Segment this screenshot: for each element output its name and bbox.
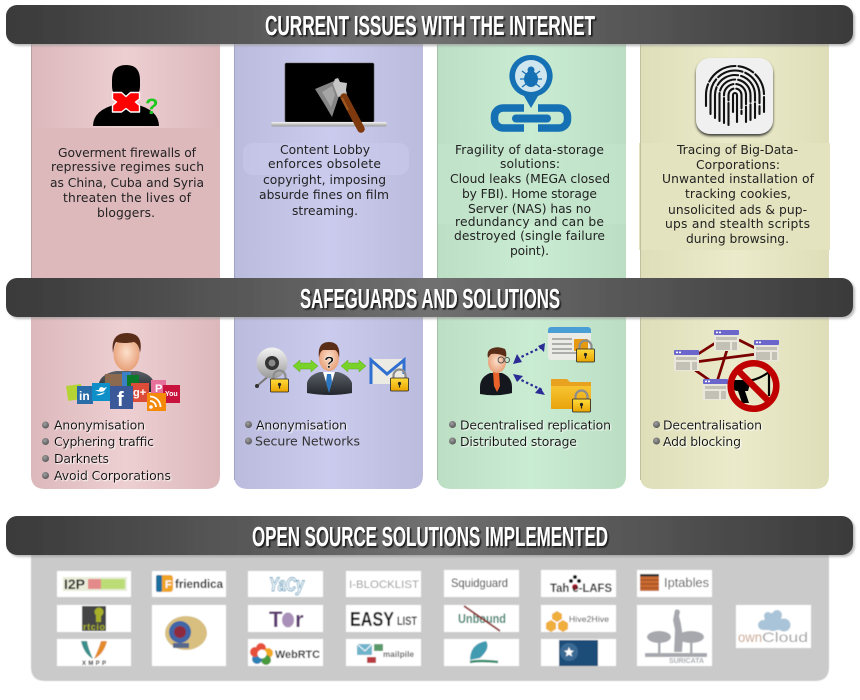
logo: Tor: r: [295, 607, 304, 632]
body text: column 4: [662, 143, 815, 246]
icon: person replicating to window and folder: [480, 327, 594, 412]
list: column 3 solutions: Decentralised replication: [460, 418, 611, 432]
body text: column 2: copyright, imposing: [263, 173, 386, 187]
logo: rtc.io: rtcio: [83, 622, 106, 632]
body text: column 3: Fragility of data-storage: [455, 143, 604, 157]
list: column 1 solutions: Darknets: [54, 451, 109, 466]
panel: column 1 red: [31, 40, 220, 489]
logo: ownCloud: [738, 610, 808, 645]
icon: decentralised network with ad blocking: [674, 330, 779, 409]
heading: open source solutions: OPEN SOURCE SOLUTIONS IMPLEMENTED: [252, 521, 608, 552]
panel: column 4 yellow: [639, 40, 830, 489]
logo: Squidguard: Squidguard: [451, 576, 508, 590]
logo: Hive2Hive: [546, 611, 609, 632]
body text: column 4: unsolicited ads & pup-: [668, 203, 807, 217]
logo: Hive2Hive: Hive2Hive: [569, 614, 609, 624]
logo: friendica: [156, 575, 224, 592]
heading: current issues: CURRENT ISSUES WITH THE INTERNET: [265, 10, 595, 41]
logo: Suricata: [645, 609, 707, 665]
logo: mailpile: mailpile: [383, 650, 415, 659]
body text: column 3: solutions:: [500, 157, 560, 171]
logo: Tahoe-LAFS: [550, 575, 612, 595]
body text: column 1: bloggers.: [97, 206, 155, 220]
body text: column 4: ups and stealth scripts: [665, 217, 810, 231]
logo: I2P: [63, 576, 127, 592]
heading: open source solutions: [6, 516, 853, 555]
logo: YaCy: YaCy: [269, 575, 305, 596]
body text: column 2: absurde fines on film: [259, 188, 389, 202]
logo: XMPP: XMPP: [82, 661, 106, 667]
body text: column 1: Goverment firewalls of: [58, 146, 197, 160]
icon: censored blogger silhouette: ?: [145, 94, 158, 119]
heading: current issues: [6, 5, 853, 44]
icon: person with social media badges: [66, 333, 180, 411]
body text: column 4: Unwanted installation of: [662, 172, 815, 186]
logo: Easylist: EASY: [350, 609, 395, 631]
logo: rtc.io: [82, 606, 106, 632]
heading: safeguards and solutions: SAFEGUARDS AND SOLUTIONS: [300, 283, 560, 314]
logo: Unbound: Unbound: [458, 611, 506, 626]
icon: webcam, anonymous person and mail with locks: ?: [324, 353, 334, 372]
panel: open source logos: [31, 550, 829, 681]
logo: InterPlanetary File System: [559, 640, 598, 666]
list: column 4 solutions: Decentralisation: [663, 418, 762, 432]
logo: ownCloud: own: [738, 629, 762, 645]
icon: laptop with axe: [271, 63, 387, 129]
logo: Unbound: [458, 606, 506, 631]
logo: I-Blocklist: I-BLOCKLIST: [349, 579, 419, 591]
body text: column 1: repressive regimes such: [51, 160, 204, 174]
logo: friendica: F: [165, 579, 172, 591]
logo: Tor: [269, 607, 304, 632]
list: column 2 solutions: Anonymisation: [256, 418, 347, 432]
body text: column 1: as China, Cuba and Syria: [50, 176, 204, 190]
icon: fingerprint: [696, 58, 773, 134]
body text: column 1: threaten the lives of: [63, 191, 192, 205]
body text: column 3: Server (NAS) has no: [468, 202, 591, 216]
body text: column 3: redundancy and can be: [455, 215, 604, 229]
icon: person with social media badges: P: [155, 383, 162, 395]
logo: XMPP: [81, 641, 107, 667]
heading: safeguards and solutions: [6, 278, 853, 317]
body text: column 3: by FBI). Home storage: [462, 187, 597, 201]
logo: Iptables: [640, 574, 709, 591]
list: column 2 solutions: Secure Networks: [255, 434, 360, 448]
list: column 3 solutions: Distributed storage: [460, 434, 577, 449]
icon: person with social media badges: g+: [133, 387, 146, 399]
icon: person with social media badges: in: [79, 389, 90, 403]
logo: Suricata: SURICATA: [669, 658, 704, 665]
body text: column 4: Tracing of Big-Data-: [676, 143, 798, 157]
body text: column 2: streaming.: [292, 204, 358, 218]
body text: column 4: during browsing.: [686, 232, 789, 246]
logo: Easylist: LIST: [397, 614, 418, 628]
logo: feather: [470, 641, 498, 662]
panel: column 3 green: [437, 40, 626, 489]
list: column 3 solutions: [449, 418, 611, 449]
body text: column 3: point).: [510, 244, 549, 258]
panel: column 2 blue: [234, 40, 423, 489]
list: column 1 solutions: Avoid Corporations: [54, 468, 171, 483]
icon: webcam, anonymous person and mail with locks: [255, 342, 408, 395]
body text: column 2: [259, 143, 389, 218]
logo: friendica: friendica: [175, 579, 224, 591]
body text: column 1: [50, 146, 204, 220]
list: column 1 solutions: Anonymisation: [54, 418, 145, 432]
logo: OnionCat: [165, 616, 207, 650]
list: column 4 solutions: Add blocking: [663, 434, 741, 449]
body text: column 3: [450, 143, 610, 258]
body text: column 2: enforces obsolete: [268, 157, 381, 171]
body text: column 3: Cloud leaks (MEGA closed: [450, 172, 610, 186]
logo: ownCloud: Cloud: [762, 629, 808, 645]
list: column 4 solutions: [653, 418, 762, 449]
logo: Tor: T: [269, 607, 283, 632]
icon: censored blogger silhouette: [93, 65, 159, 126]
list: column 1 solutions: [42, 418, 171, 483]
body text: column 4: Corporations:: [696, 158, 780, 172]
logo: mailpile: [357, 644, 415, 663]
body text: column 3: destroyed (single failure: [454, 229, 605, 243]
logo: Iptables: Iptables: [664, 576, 709, 590]
list: column 1 solutions: Cyphering traffic: [54, 434, 154, 449]
icon: person with social media badges: You: [165, 391, 178, 398]
logo: WebRTC: WebRTC: [275, 649, 320, 661]
logo: I2P: I2P: [64, 576, 85, 592]
logo: Tahoe-LAFS: Tah e-LAFS: [550, 581, 612, 595]
body text: column 4: tracking cookies,: [685, 187, 791, 201]
icon: bug location pin and chain: [494, 55, 568, 128]
icon: person with social media badges: f: [117, 389, 124, 411]
list: column 2 solutions: [245, 418, 360, 448]
logo: WebRTC: [250, 643, 320, 665]
body text: column 2: Content Lobby: [280, 143, 370, 157]
